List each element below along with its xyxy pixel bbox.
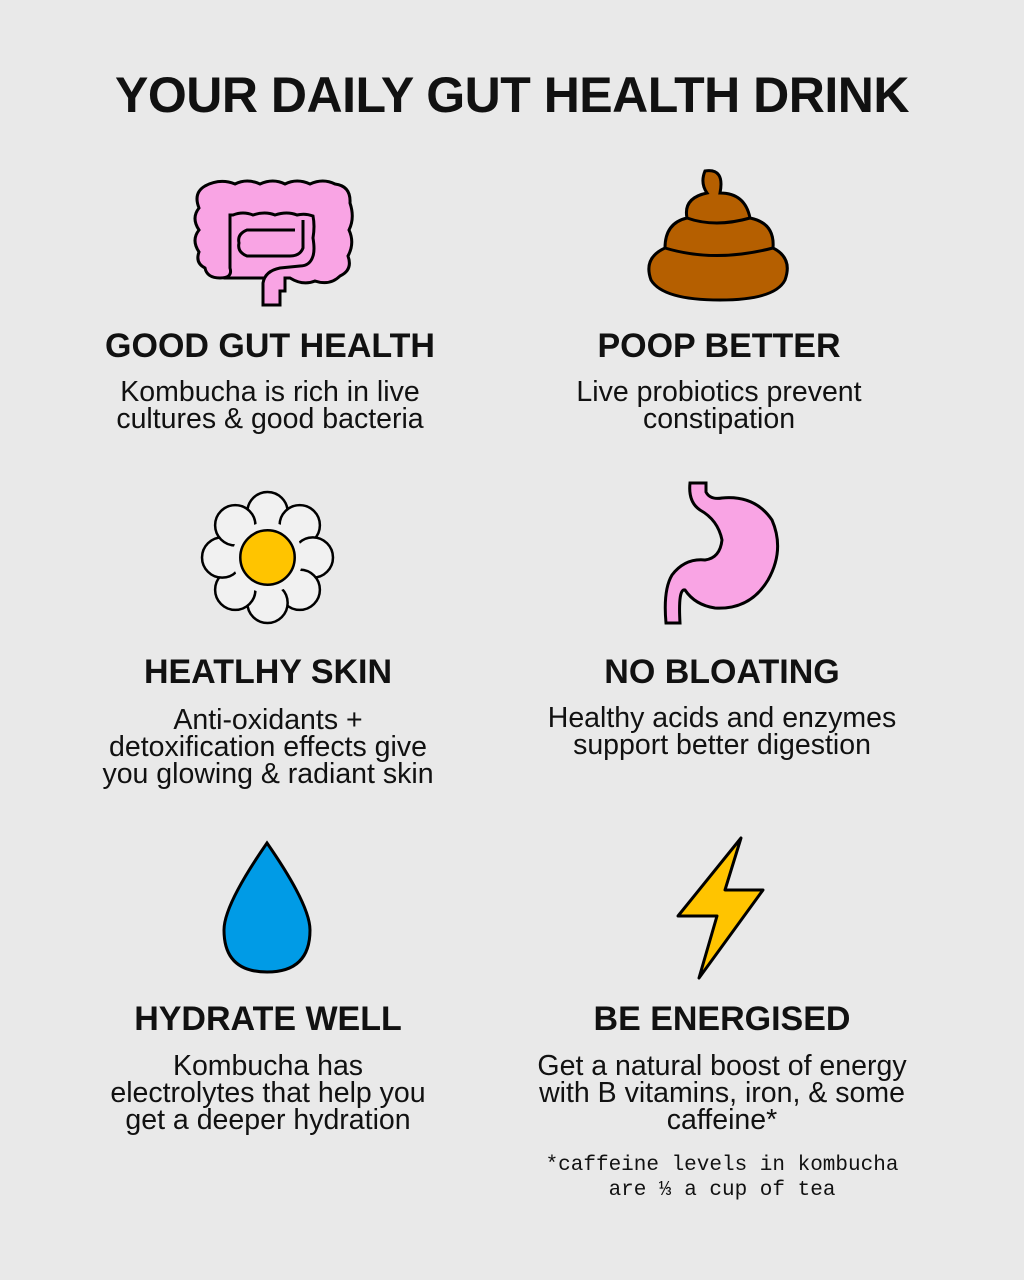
text: poop better: Live probiotics prevent	[576, 376, 862, 408]
icon: lightning bolt	[676, 836, 764, 980]
footnote: caffeine: *caffeine levels in kombucha	[546, 1154, 898, 1177]
text: poop better: constipation	[643, 403, 795, 435]
text: poop better	[576, 376, 862, 435]
icon: intestine	[194, 180, 354, 306]
footnote: caffeine	[546, 1154, 898, 1202]
text: be energised: Get a natural boost of energy	[537, 1050, 907, 1082]
text: hydrate well: get a deeper hydration	[125, 1104, 411, 1136]
text: healthy skin: detoxification effects give	[109, 731, 427, 763]
icon: stomach	[664, 482, 780, 624]
heading: good gut health: GOOD GUT HEALTH	[105, 327, 435, 365]
footnote: caffeine: are ⅓ a cup of tea	[609, 1179, 835, 1202]
text: hydrate well: electrolytes that help you	[110, 1077, 426, 1109]
text: hydrate well	[110, 1050, 426, 1136]
text: be energised: caffeine*	[667, 1104, 777, 1136]
text: good gut health: cultures & good bacteria	[116, 403, 424, 435]
icon: poop	[647, 169, 789, 302]
title: YOUR DAILY GUT HEALTH DRINK	[115, 67, 909, 123]
text: healthy skin	[102, 704, 434, 790]
heading: hydrate well: HYDRATE WELL	[134, 1000, 402, 1038]
icon: water drop	[222, 840, 312, 974]
text: no bloating: Healthy acids and enzymes	[548, 702, 896, 734]
text: good gut health: Kombucha is rich in live	[120, 376, 420, 408]
icon: flower	[200, 490, 334, 624]
text: no bloating	[548, 702, 896, 761]
heading: no bloating: NO BLOATING	[604, 653, 840, 691]
text: hydrate well: Kombucha has	[173, 1050, 363, 1082]
heading: healthy skin: HEATLHY SKIN	[144, 653, 392, 691]
heading: be energised: BE ENERGISED	[594, 1000, 850, 1038]
heading: poop better: POOP BETTER	[597, 327, 841, 365]
text: be energised	[537, 1050, 907, 1136]
text: good gut health	[116, 376, 424, 435]
text: be energised: with B vitamins, iron, & some	[539, 1077, 905, 1109]
text: healthy skin: you glowing & radiant skin	[102, 758, 434, 790]
text: healthy skin: Anti-oxidants +	[173, 704, 363, 736]
text: no bloating: support better digestion	[573, 729, 871, 761]
